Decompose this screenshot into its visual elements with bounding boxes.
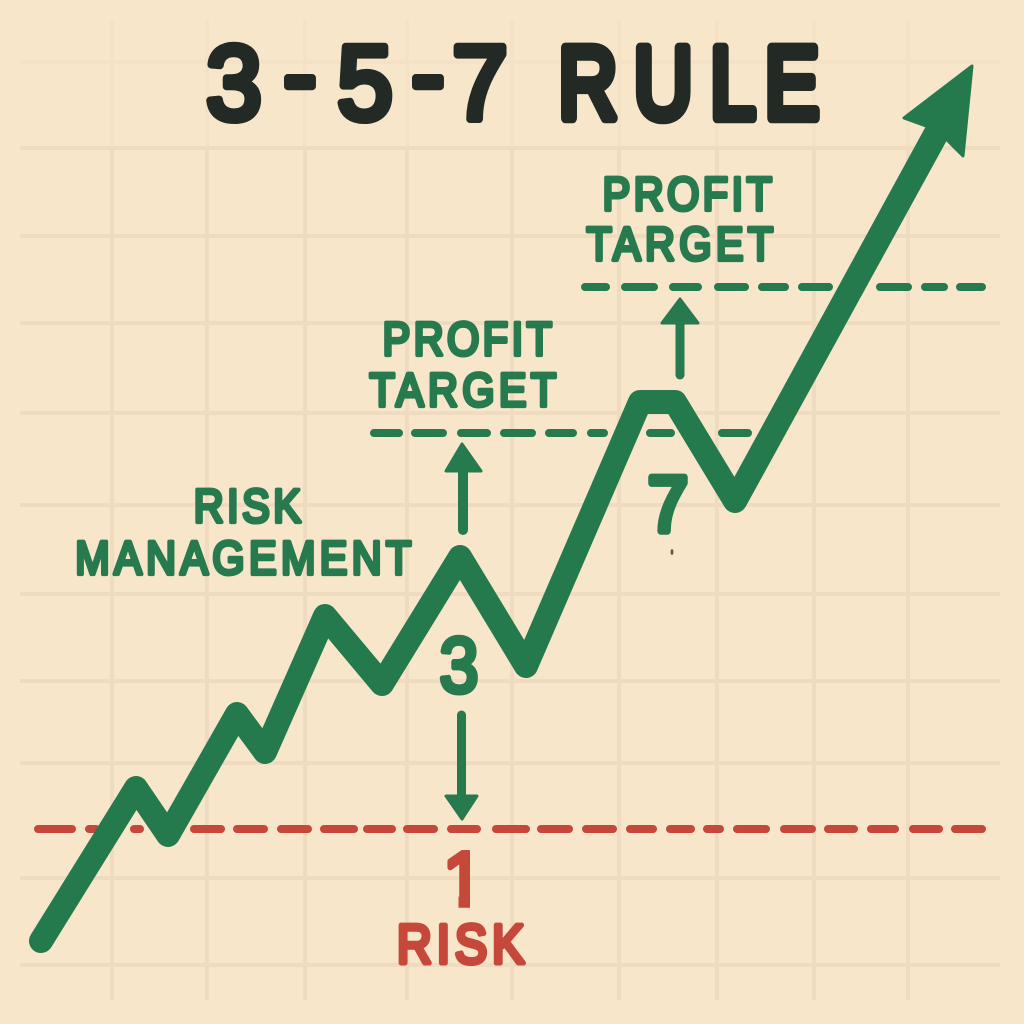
label: lower profit target: TARGET <box>369 363 561 416</box>
label: risk management: MANAGEMENT <box>75 531 416 584</box>
label: lower profit target: PROFIT <box>383 312 555 365</box>
arrow: down to risk line <box>446 715 477 819</box>
label: upper profit target: PROFIT <box>603 167 775 220</box>
number 1: 1 <box>443 837 485 922</box>
title: 3-5-7 <box>206 16 508 142</box>
title <box>206 16 819 142</box>
arrow: up to lower target <box>446 444 481 530</box>
label: risk management <box>75 479 416 584</box>
title: RULE <box>559 26 819 140</box>
label: risk management: RISK <box>194 479 304 532</box>
number 3: 3 <box>439 621 479 709</box>
arrow: up to upper target <box>662 299 698 375</box>
label: risk: RISK <box>397 913 529 975</box>
risk line <box>38 825 982 833</box>
profit target line lower <box>374 429 748 437</box>
label: upper profit target: TARGET <box>586 217 778 270</box>
rising price arrow <box>41 66 972 941</box>
profit target line upper <box>585 283 982 291</box>
label: upper profit target <box>586 167 778 270</box>
number 7: 7 <box>648 460 688 548</box>
label: lower profit target <box>369 312 561 416</box>
